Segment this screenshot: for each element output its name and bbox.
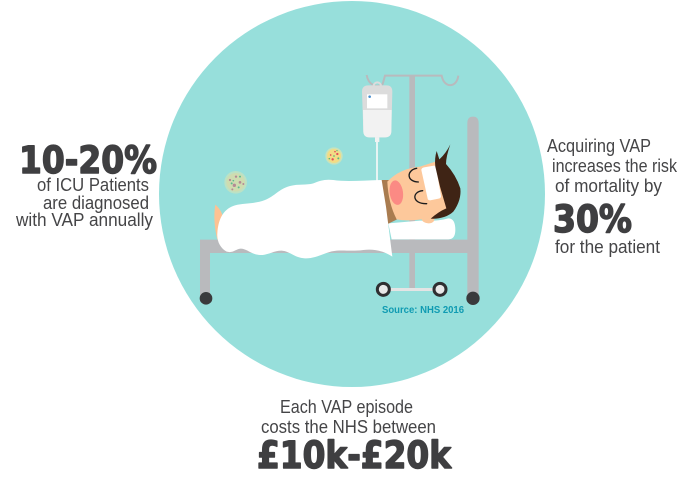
hair	[431, 144, 461, 219]
stat: mortality risk	[547, 136, 678, 257]
stat: ICU diagnosis rate: with VAP annually	[15, 210, 153, 230]
blanket	[217, 180, 392, 258]
stat: cost to NHS	[257, 397, 452, 477]
IV stand wheels	[377, 283, 446, 295]
virus large	[224, 171, 247, 194]
stat: ICU diagnosis rate	[15, 139, 157, 230]
pillow	[388, 218, 455, 239]
bed frame	[200, 117, 480, 305]
stat: mortality risk: increases the risk	[552, 156, 678, 176]
IV pole	[367, 75, 458, 288]
stat: ICU diagnosis rate: are diagnosed	[43, 193, 149, 213]
closed eyes	[409, 168, 427, 204]
stat: ICU diagnosis rate: of ICU Patients	[37, 175, 149, 195]
head	[387, 161, 448, 223]
illustration: patient in hospital bed	[200, 75, 480, 305]
forehead towel	[421, 166, 441, 200]
teal background circle	[159, 1, 545, 387]
foot	[214, 205, 223, 240]
stat: cost to NHS: costs the NHS between	[261, 417, 436, 437]
stat: cost to NHS: Each VAP episode	[280, 397, 413, 417]
stat: ICU diagnosis rate: 10-20%	[19, 139, 157, 182]
IV drip bag	[362, 82, 392, 182]
stat: mortality risk: Acquiring VAP	[547, 136, 651, 156]
neck	[381, 180, 399, 224]
source note: Source: NHS 2016	[382, 304, 464, 316]
stat: mortality risk: for the patient	[555, 237, 660, 257]
stat: mortality risk: of mortality by	[555, 176, 662, 196]
stat: cost to NHS: £10k-£20k	[257, 434, 452, 477]
cheek blush	[388, 180, 405, 206]
virus small	[325, 147, 343, 165]
stat: mortality risk: 30%	[553, 198, 632, 241]
